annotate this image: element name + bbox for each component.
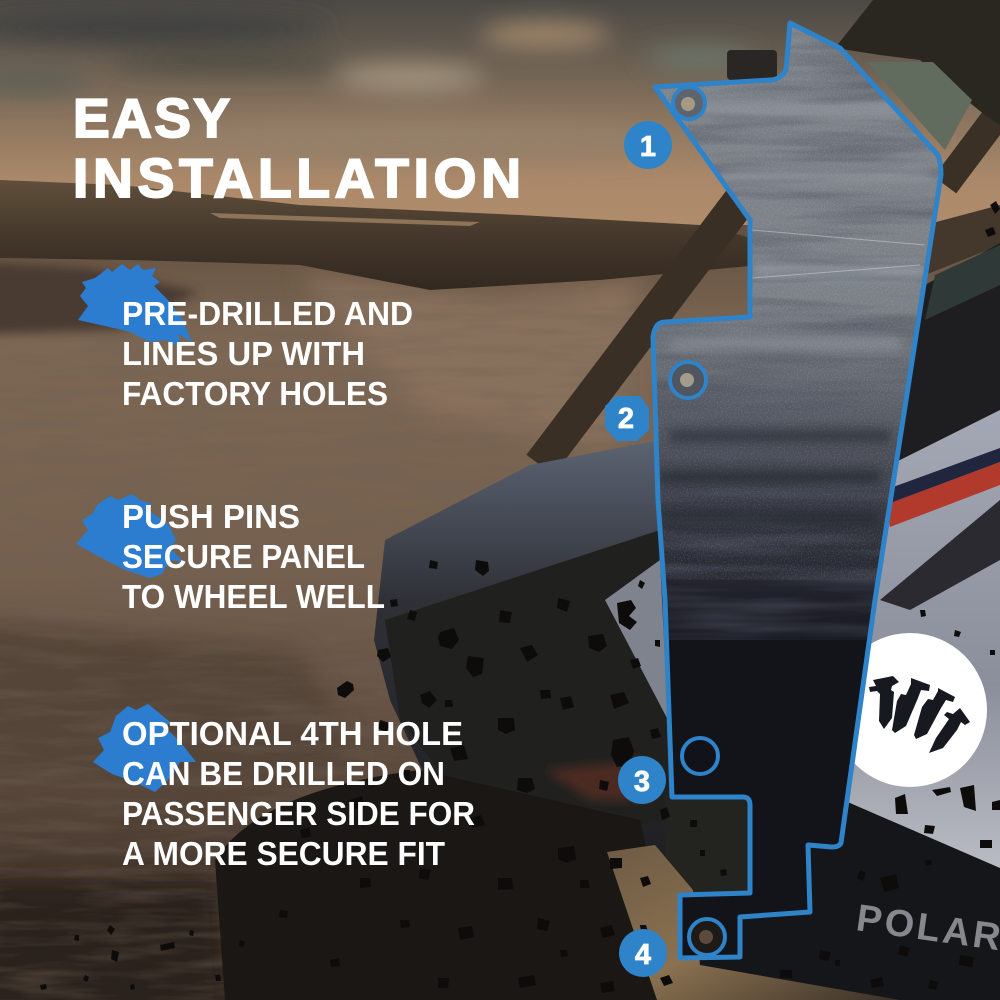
windshield (867, 62, 972, 150)
red stripe (885, 462, 1000, 527)
title (73, 87, 521, 209)
text block: pre-drilled: LINES UP WITH (122, 335, 365, 372)
background: clouds (0, 15, 755, 158)
text block: optional 4th hole: A MORE SECURE FIT (122, 835, 445, 872)
text block: optional 4th hole: OPTIONAL 4TH HOLE (122, 715, 463, 752)
number badge 1: 1 (640, 131, 656, 163)
panel: wheel well guard with blue outline (640, 20, 950, 970)
text block: push pins: PUSH PINS (122, 498, 300, 535)
text block: pre-drilled: FACTORY HOLES (122, 375, 388, 412)
text block: push pins (122, 498, 385, 615)
background: sky (0, 0, 1000, 235)
background: distant dark ridge (0, 180, 760, 290)
mounting hole 3 (682, 738, 718, 774)
roll cage upper bar (945, 105, 1000, 185)
text block: optional 4th hole (122, 715, 475, 872)
number badge 3 (618, 756, 666, 804)
panel outline (653, 23, 941, 958)
paint splash 2 (76, 494, 184, 578)
roll cage bar (540, 198, 742, 465)
paint splash 1 (78, 264, 192, 348)
background: sand ripples (0, 290, 640, 1000)
mounting hole 1 (673, 87, 705, 119)
paint splash 3 (93, 704, 196, 792)
background: far ridge right (925, 205, 1000, 275)
mounting hole 2 (670, 362, 706, 398)
number badge 2 (605, 396, 649, 441)
background: highlight on ridge (210, 213, 480, 226)
text block: pre-drilled (122, 295, 413, 412)
title: EASY (73, 87, 230, 149)
text block: optional 4th hole: CAN BE DRILLED ON (122, 755, 445, 792)
front shadow of vehicle (385, 530, 670, 850)
vehicle hood (374, 440, 680, 980)
background: dune shadow (0, 262, 200, 334)
number badge 4 (619, 929, 667, 977)
sand patch under vehicle (607, 845, 900, 1000)
dark intake (880, 500, 1000, 610)
background: sand dunes (0, 225, 1000, 1000)
navy stripe (885, 448, 1000, 505)
mirror (727, 50, 777, 80)
background: sand shading (0, 275, 640, 1000)
dark wheel well behind panel (665, 790, 755, 900)
title: INSTALLATION (73, 147, 521, 209)
number badge 3: 3 (634, 766, 650, 798)
text block: pre-drilled: PRE-DRILLED AND (122, 295, 413, 332)
text block: push pins: TO WHEEL WELL (122, 578, 385, 615)
wheel (215, 770, 680, 1000)
mounting hole 4 (689, 919, 725, 955)
dark lower rocker (680, 800, 1000, 1000)
text block: push pins: SECURE PANEL (122, 538, 365, 575)
roof canopy (835, 0, 1000, 125)
number badge 4: 4 (635, 939, 651, 971)
vehicle side body (843, 410, 1000, 868)
number badge 1 (624, 121, 672, 169)
cab interior (895, 243, 1000, 470)
text block: optional 4th hole: PASSENGER SIDE FOR (122, 795, 475, 832)
debris splatter (40, 201, 1000, 993)
white circle: push pins inset (833, 633, 987, 787)
body panel fragment left (605, 560, 668, 720)
icon: push pins (869, 676, 970, 753)
red tail (545, 760, 650, 800)
number badge 2: 2 (618, 403, 634, 435)
